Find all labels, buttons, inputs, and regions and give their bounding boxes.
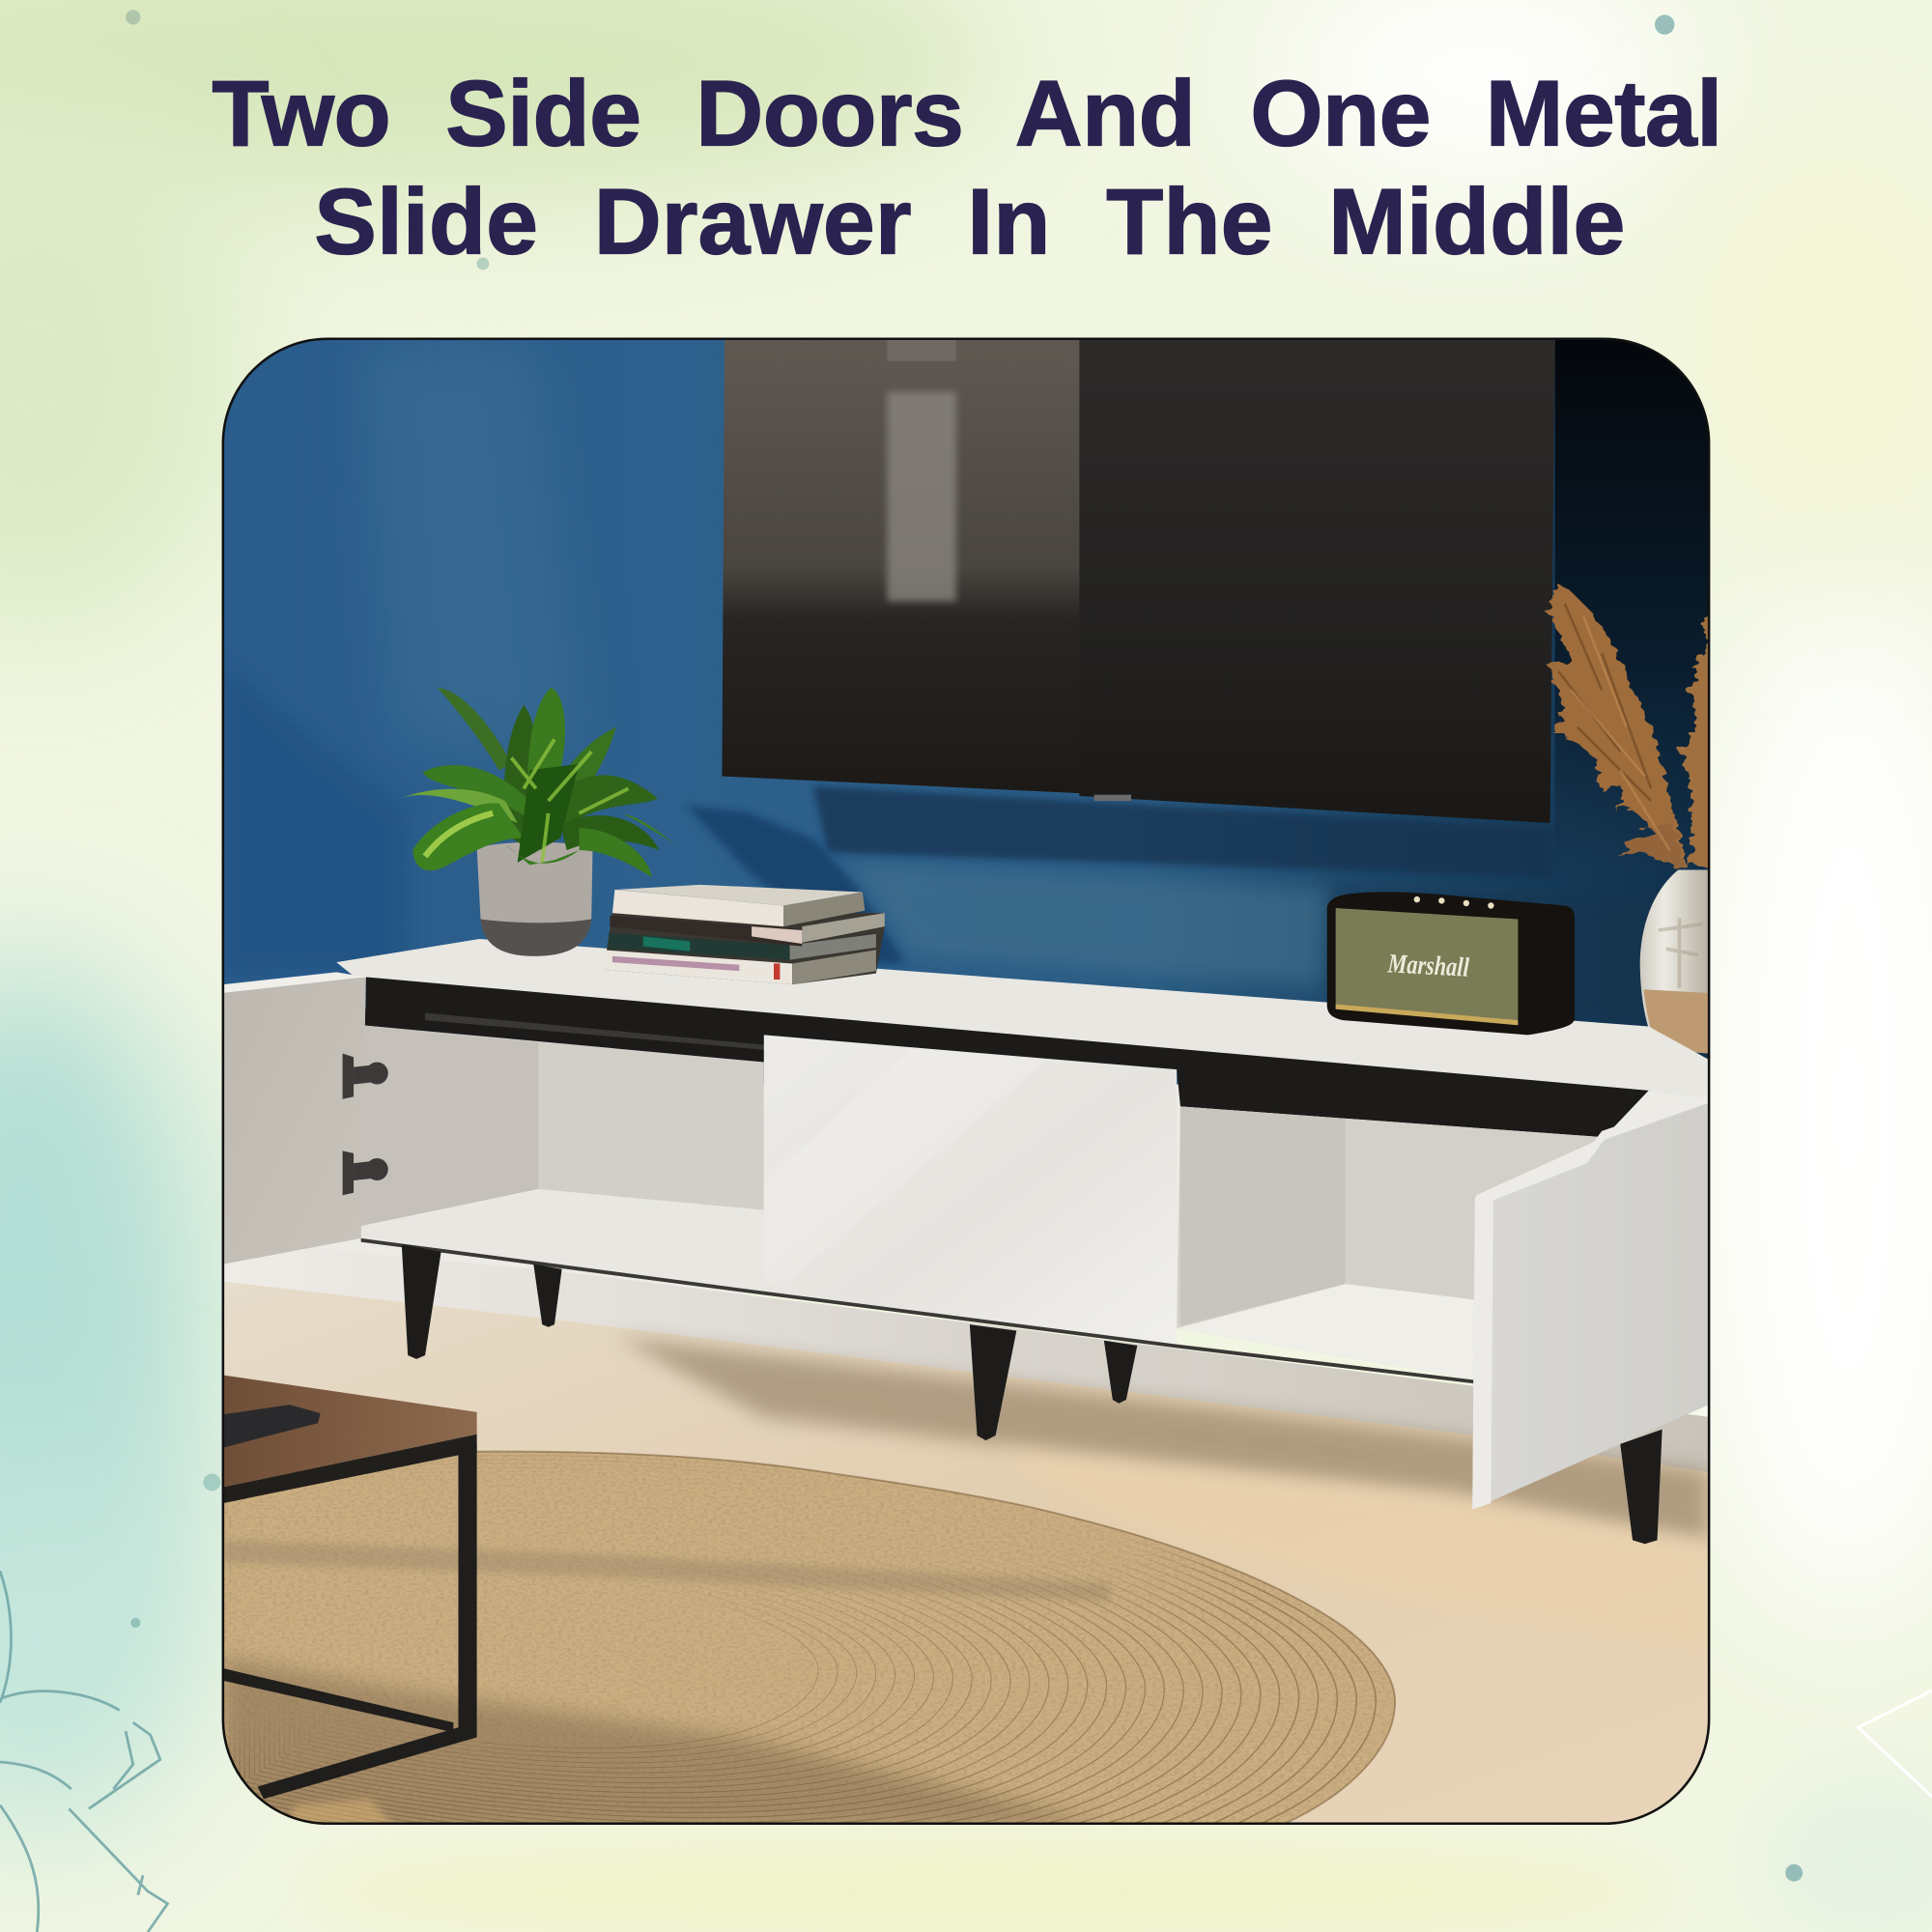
second book [610,916,802,947]
wall [223,339,1709,1103]
potted plant [401,688,675,956]
left compartment [361,1025,764,1292]
top book [617,885,863,906]
wall light and shadow [223,339,1709,1035]
speaker: Marshall [1386,949,1470,983]
photo frame [223,339,1709,1824]
right compartment [1177,1106,1605,1380]
vase [1640,870,1709,1054]
middle drawer [764,1035,1177,1345]
floor shadow [616,1337,1709,1540]
bottom book [604,950,792,984]
photo: TV unit in living room [185,339,1719,1897]
rug [185,1430,1406,1897]
hinges [343,1054,388,1195]
floor [223,1282,1709,1824]
book stack backing [604,912,885,984]
lit floor patch [1049,1456,1677,1540]
leaves [401,688,675,877]
drawer sun streak [764,1047,1047,1282]
legs [402,1244,1662,1544]
decorative flower outline bottom-left [0,1571,167,1932]
left door [223,972,366,1264]
stack of books [604,885,885,984]
wall beyond TV [1555,339,1709,881]
pot [477,842,593,956]
skirting under unit [336,1265,1708,1472]
cabinet underside strip [361,1238,1475,1383]
pampas grass [1548,582,1719,867]
speaker [1327,892,1575,1035]
title: Two Side Doors And One Metal [212,61,1722,166]
wall base [223,1084,1709,1293]
cabinet top [336,939,1709,1099]
TV [722,339,1555,823]
black inner band [361,977,1649,1137]
right door [1472,1094,1709,1509]
title [212,61,1722,274]
band highlight [425,1012,764,1050]
rug plain braided area [185,1430,1233,1762]
third book [609,933,790,960]
title: Slide Drawer In The Middle [314,169,1625,274]
decorative outline right [1858,1690,1932,1797]
coffee table [223,1375,477,1799]
